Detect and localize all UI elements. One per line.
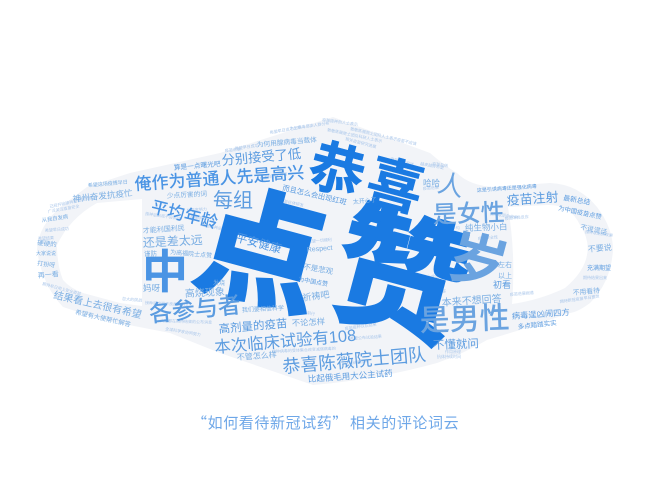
phrase: 我们要相信科学: 我们要相信科学 xyxy=(242,304,284,314)
keyword: 各参与者: 各参与者 xyxy=(148,291,242,327)
phrase: 本次临床试验有108: 本次临床试验有108 xyxy=(214,327,357,357)
phrase: 平安健康: 平安健康 xyxy=(234,230,283,256)
keyword: 岁: 岁 xyxy=(441,224,514,301)
phrase: 算是一点曙光吧: 算是一点曙光吧 xyxy=(173,159,221,172)
phrase: 发烧: 发烧 xyxy=(213,279,225,287)
keyword: 是女性: 是女性 xyxy=(432,200,505,229)
keyword: 点赞 xyxy=(183,170,482,367)
fine filler text: 疫苗接种的人士表示 xyxy=(322,116,358,127)
fine filler text: 期待早日用上安全疫苗 xyxy=(42,280,82,296)
phrase: 高烧现象: 高烧现象 xyxy=(184,285,225,300)
keyword: 人: 人 xyxy=(435,168,467,202)
phrase: 病毒逞凶闹四方: 病毒逞凶闹四方 xyxy=(511,307,570,321)
phrase: 大家说说: 大家说说 xyxy=(36,250,56,257)
fine filler text: 疫苗进展报道 xyxy=(390,155,414,167)
fine filler text: 相关疫苗研究进展 xyxy=(345,135,377,149)
fine filler text: 希望早日成功上市 xyxy=(269,124,302,135)
phrase: 妈呀: 妈呀 xyxy=(143,283,161,293)
phrase: 分别接受了低: 分别接受了低 xyxy=(221,145,302,168)
phrase: 少点厉害的词: 少点厉害的词 xyxy=(167,189,207,200)
phrase: 神州奋发抗疫忙: 神州奋发抗疫忙 xyxy=(72,187,133,204)
phrase: 硬硬的: 硬硬的 xyxy=(37,238,58,249)
fine filler text: 希望早日成功 xyxy=(45,225,69,233)
phrase: 谨防: 谨防 xyxy=(144,249,158,258)
phrase: 左右 以上: 以上 xyxy=(498,271,512,280)
fine filler text: 巨大的挑战 xyxy=(122,295,142,303)
phrase: 希望这场疫情早日结束: 希望这场疫情早日 xyxy=(88,179,128,189)
fine filler text: 接种以后的效果 xyxy=(490,210,518,220)
phrase: 打扮呀: 打扮呀 xyxy=(37,259,56,269)
fine filler text: 疫苗总结 xyxy=(432,160,449,168)
fine filler text: 已经开始接种疫苗的人群 xyxy=(49,194,93,209)
fine filler text: 不知道咋说好一句 xyxy=(428,224,460,233)
phrase: 每组: 每组 xyxy=(213,189,253,212)
fine filler text: 疫苗进展报道 xyxy=(510,289,534,297)
phrase: 不懂就问: 不懂就问 xyxy=(433,336,479,352)
phrase: 这是引诱病毒还是强化病毒: 这是引诱病毒还是强化病毒 xyxy=(477,183,537,194)
phrase: 纯生物小白: 纯生物小白 xyxy=(465,222,508,233)
phrase: 太开心了: 太开心了 xyxy=(352,196,377,206)
caption: “如何看待新冠试药”相关的评论词云 xyxy=(192,412,459,433)
phrase: 为中国疫苗点赞: 为中国疫苗点赞 xyxy=(558,203,603,221)
fine filler text: 疫苗不良反应 xyxy=(505,213,529,221)
phrase: 高剂量的疫苗: 高剂量的疫苗 xyxy=(218,316,288,336)
phrase: 为何用腺病毒当载体: 为何用腺病毒当载体 xyxy=(256,135,317,149)
fine filler text: 期待结果出来 xyxy=(583,274,607,280)
fine filler text: 全球科学家协同努力 xyxy=(165,325,201,337)
fine filler text: 疫苗安全性 xyxy=(478,233,498,241)
keyword: 点赞: 点 xyxy=(183,170,339,336)
fine filler text: 希望结果 xyxy=(38,234,54,241)
fine filler text: 疫苗接种后的抗体 xyxy=(202,221,234,234)
fine filler text: 希望早日成功 xyxy=(234,142,259,151)
phrase: 从我自发病: 从我自发病 xyxy=(41,212,69,224)
phrase: 疫苗注射: 疫苗注射 xyxy=(506,189,559,208)
fine filler text: 相关临床试验已经开始 xyxy=(285,207,325,221)
keyword: 点赞: 赞 xyxy=(317,190,482,367)
phrase: 本来不想回答: 本来不想回答 xyxy=(441,292,502,309)
fine filler text: 希望公布试验结果 xyxy=(350,333,382,341)
fine filler text xyxy=(38,116,613,366)
fine filler text: 抗体持续时间 xyxy=(437,353,461,359)
fine filler text: 不知道咋答 xyxy=(426,287,446,294)
fine filler text: 结果公布 xyxy=(380,253,397,262)
phrase: 才能利国利民: 才能利国利民 xyxy=(143,223,185,235)
fine filler text: 感谢科研工作者 xyxy=(259,170,288,181)
fine filler text: 接种后出现不良反应 xyxy=(145,210,181,221)
fine filler text: 病毒疫苗抗体研发 xyxy=(272,195,304,208)
phrase: 比起俄毛用大公主试药: 比起俄毛用大公主试药 xyxy=(307,368,393,384)
phrase: 结果看上去很有希望: 结果看上去很有希望 xyxy=(52,288,143,321)
phrase: 最新总结: 最新总结 xyxy=(563,193,591,207)
phrase: 希望有大使帮忙解答: 希望有大使帮忙解答 xyxy=(75,307,132,329)
fine filler text: 希望一切顺利 xyxy=(308,236,332,244)
fine filler text: 接种后出现不良反应的人 xyxy=(145,299,189,307)
fine filler text: 接种以后的效果 xyxy=(585,228,613,238)
phrase: 平均年龄: 平均年龄 xyxy=(149,197,220,232)
fine filler text: 疫苗进展 xyxy=(423,184,439,191)
fine filler text: 疫苗进展 xyxy=(224,145,241,153)
keyword: 是男性: 是男性 xyxy=(419,302,510,338)
phrase: 左右 以上: 左右 xyxy=(498,260,512,269)
fine filler text: 期待新冠疫苗早日面世 xyxy=(559,292,600,304)
phrase: 左右 以上 xyxy=(498,260,512,280)
fine filler text: 为何病毒感染人群分布 xyxy=(289,119,330,131)
fine filler text: 试验结果公布 xyxy=(344,358,369,366)
fine filler text: 等待者前行 xyxy=(295,307,316,316)
phrase: 不管怎么样: 不管怎么样 xyxy=(236,349,277,362)
phrase: 不要说: 不要说 xyxy=(587,242,612,254)
fine filler text: 疫苗接种以后结果 xyxy=(344,321,377,331)
phrase: 为高福院士点赞: 为高福院士点赞 xyxy=(170,248,212,260)
keyword: 恭喜: 恭喜 xyxy=(302,133,434,225)
fine filler text: 小心求证 xyxy=(423,273,439,279)
phrase: 充满期望: 充满期望 xyxy=(587,264,611,272)
phrase: 不论怎样: 不论怎样 xyxy=(292,316,325,328)
fine filler text: 大家都在期待结果的公布消息 xyxy=(160,317,212,325)
phrase: 还是差太远: 还是差太远 xyxy=(142,232,203,250)
phrase: 不是悲观: 不是悲观 xyxy=(303,261,334,276)
phrase: 不说谎话: 不说谎话 xyxy=(580,222,608,237)
phrase: 不用看待: 不用看待 xyxy=(572,286,600,297)
phrase: 初看: 初看 xyxy=(493,279,511,290)
fine filler text: 致敬陈薇院士团队科研人士表示 xyxy=(327,126,383,144)
fine filler text: 作用原理 xyxy=(445,348,461,354)
phrase: 祈祷吧: 祈祷吧 xyxy=(302,288,330,303)
keyword: 中: 中 xyxy=(142,246,188,298)
fine filler text: 太兴奋了 xyxy=(440,250,456,256)
phrase: 恭喜陈薇院士团队: 恭喜陈薇院士团队 xyxy=(282,345,427,377)
fine filler text: 致敬陈薇院士团队人士表示疫苗不应该 xyxy=(350,125,417,146)
fine filler text: 接种病毒的受体集合改变减弱病毒的 xyxy=(272,345,336,354)
phrase: Respect: Respect xyxy=(307,245,333,254)
phrase: 再一看: 再一看 xyxy=(37,270,59,280)
fine filler text: 越来越好希望 xyxy=(420,160,445,170)
fine filler text: 疫苗研发 xyxy=(190,213,207,221)
fine filler text: 科学家努力 xyxy=(187,205,207,213)
phrase: 多点踏踏实实: 多点踏踏实实 xyxy=(517,318,557,331)
keyword: 俺作为普通人先是高兴: 俺作为普通人先是高兴 xyxy=(134,163,305,194)
phrase: 哈哈: 哈哈 xyxy=(423,178,441,188)
mask silhouette xyxy=(37,117,613,385)
fine filler text: 接种疫苗 xyxy=(352,287,369,296)
fine filler text: 广泛关注疫苗安全 xyxy=(47,203,80,214)
fine filler text: 疫苗接种后病毒 xyxy=(359,306,388,316)
phrase: 而且怎么会出现红斑: 而且怎么会出现红斑 xyxy=(282,183,348,207)
phrase: 为中国点赞: 为中国点赞 xyxy=(298,275,329,288)
